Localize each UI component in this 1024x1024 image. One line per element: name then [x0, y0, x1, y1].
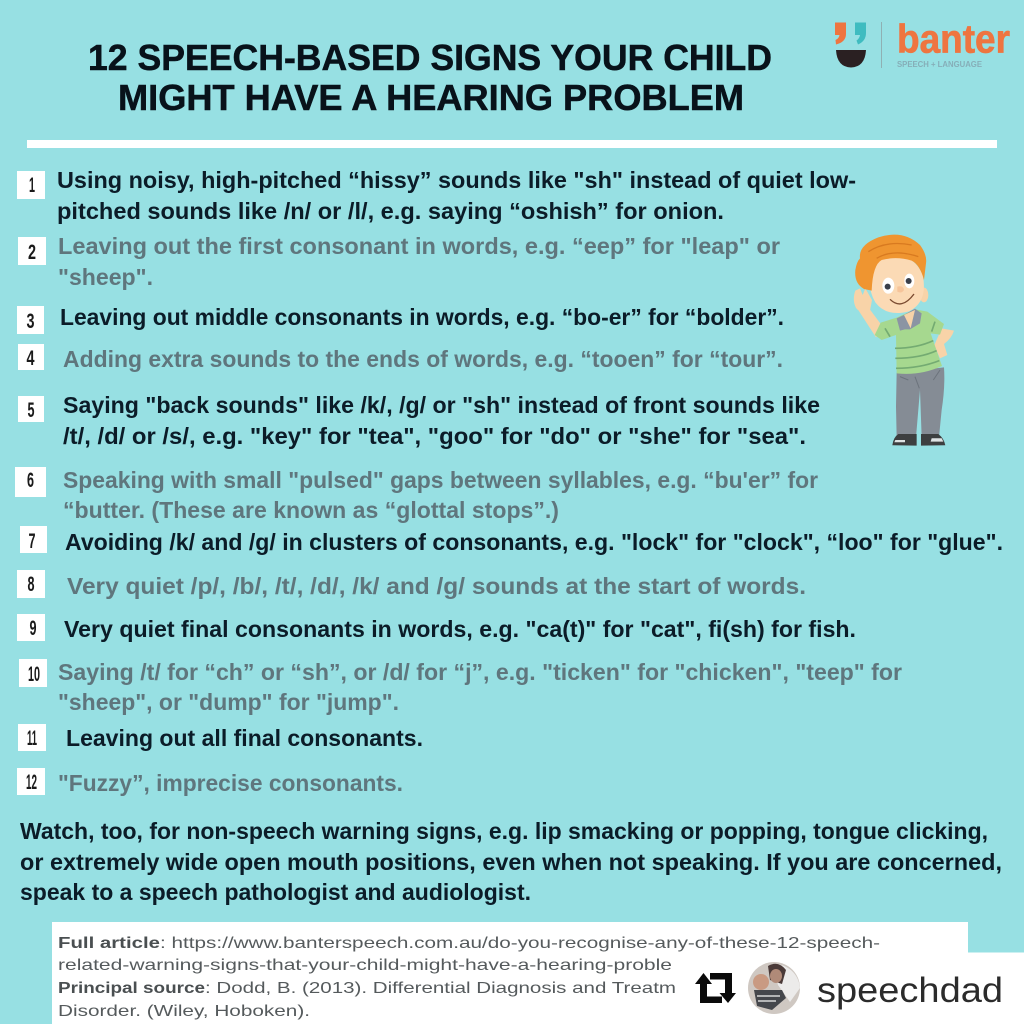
closing paragraph: non-speech warning signs: or extremely wide open mouth positions, even when not speaking. If you are concerned,	[20, 849, 1002, 875]
sign 10	[19, 659, 902, 715]
logo: banter speech and language	[835, 18, 1010, 69]
sign 5: 5	[28, 399, 35, 422]
sign 5: /t/, /d/ or /s/, e.g. "key" for "tea", "goo" for "do" or "she" for "sea".	[63, 423, 806, 449]
sign 2: "sheep".	[58, 264, 153, 290]
sign 6	[15, 467, 818, 523]
sign 10: "sheep", or "dump" for "jump".	[58, 689, 399, 715]
closing paragraph: non-speech warning signs: speak to a speech pathologist and audiologist.	[20, 879, 531, 905]
avatar: father and baby	[748, 962, 800, 1014]
sign 11: Leaving out all final consonants.	[66, 725, 423, 751]
sign 3: Leaving out middle consonants in words, e.g. “bo-er” for “bolder”.	[60, 304, 784, 330]
sign 1: pitched sounds like /n/ or /l/, e.g. saying “oshish” for onion.	[57, 198, 724, 224]
sign 2: Leaving out the first consonant in words, e.g. “eep” for "leap" or	[58, 233, 780, 259]
sign 9: 9	[30, 617, 36, 640]
sign 6: “butter. (These are known as “glottal stops”.)	[63, 497, 559, 523]
sign 12: "Fuzzy”, imprecise consonants.	[58, 770, 403, 796]
title: 12 SPEECH-BASED SIGNS YOUR CHILD	[88, 37, 772, 78]
closing paragraph: non-speech warning signs	[20, 818, 1002, 905]
sign 6: 6	[27, 469, 34, 492]
sign 7: 7	[28, 530, 36, 553]
sign 4: 4	[26, 347, 35, 370]
sign 9: Very quiet final consonants in words, e.g. "ca(t)" for "cat", fi(sh) for fish.	[64, 616, 856, 642]
panel: sources: Principal source	[58, 980, 205, 997]
panel: sources: : Dodd, B. (2013). Differential Diagnosis and Treatm	[205, 980, 676, 997]
logo: banter speech and language: SPEECH + LANGUAGE	[897, 60, 983, 69]
closing paragraph: non-speech warning signs: Watch, too, for non-speech warning signs, e.g. lip smacking or popping, tongue clicking,	[20, 818, 988, 844]
username: speechdad	[817, 971, 1003, 1010]
sign 5: Saying "back sounds" like /k/, /g/ or "sh" instead of front sounds like	[63, 392, 820, 418]
sign 2: 2	[28, 241, 36, 264]
sign 8: 8	[28, 573, 35, 596]
sign 2	[18, 233, 780, 290]
sign 1: 1	[29, 174, 35, 197]
repost badge	[678, 952, 1024, 1024]
sign 6: Speaking with small "pulsed" gaps between syllables, e.g. “bu'er” for	[63, 467, 818, 493]
sign 12: 12	[26, 771, 37, 794]
panel: sources: Disorder. (Wiley, Hoboken).	[58, 1003, 310, 1020]
panel: sources: Full article	[58, 935, 160, 952]
sign 1	[17, 167, 856, 224]
sign 5	[18, 392, 820, 449]
sign 11: 11	[27, 727, 37, 750]
sign 10: 10	[28, 663, 40, 686]
sign 10: Saying /t/ for “ch” or “sh”, or /d/ for “j”, e.g. "ticken" for "chicken", "teep" for	[58, 659, 902, 685]
title: MIGHT HAVE A HEARING PROBLEM	[118, 77, 744, 118]
title	[88, 37, 772, 118]
sign 7: Avoiding /k/ and /g/ in clusters of consonants, e.g. "lock" for "clock", “loo" for "glue".	[65, 529, 1003, 555]
sign 1: Using noisy, high-pitched “hissy” sounds like "sh" instead of quiet low-	[57, 167, 856, 193]
icon: repost arrows	[695, 973, 736, 1003]
sign 3: 3	[26, 310, 34, 333]
logo: banter speech and language: banter	[897, 18, 1010, 62]
illustration: boy cupping his ear	[854, 235, 954, 446]
sign 8: Very quiet /p/, /b/, /t/, /d/, /k/ and /g/ sounds at the start of words.	[67, 573, 806, 599]
sign 4: Adding extra sounds to the ends of words, e.g. “tooen” for “tour”.	[63, 346, 783, 372]
panel: sources: : https://www.banterspeech.com.au/do-you-recognise-any-of-these-12-speech-	[160, 935, 880, 952]
panel: sources	[52, 922, 968, 1024]
panel: sources: related-warning-signs-that-your-child-might-have-a-hearing-proble	[58, 957, 672, 974]
